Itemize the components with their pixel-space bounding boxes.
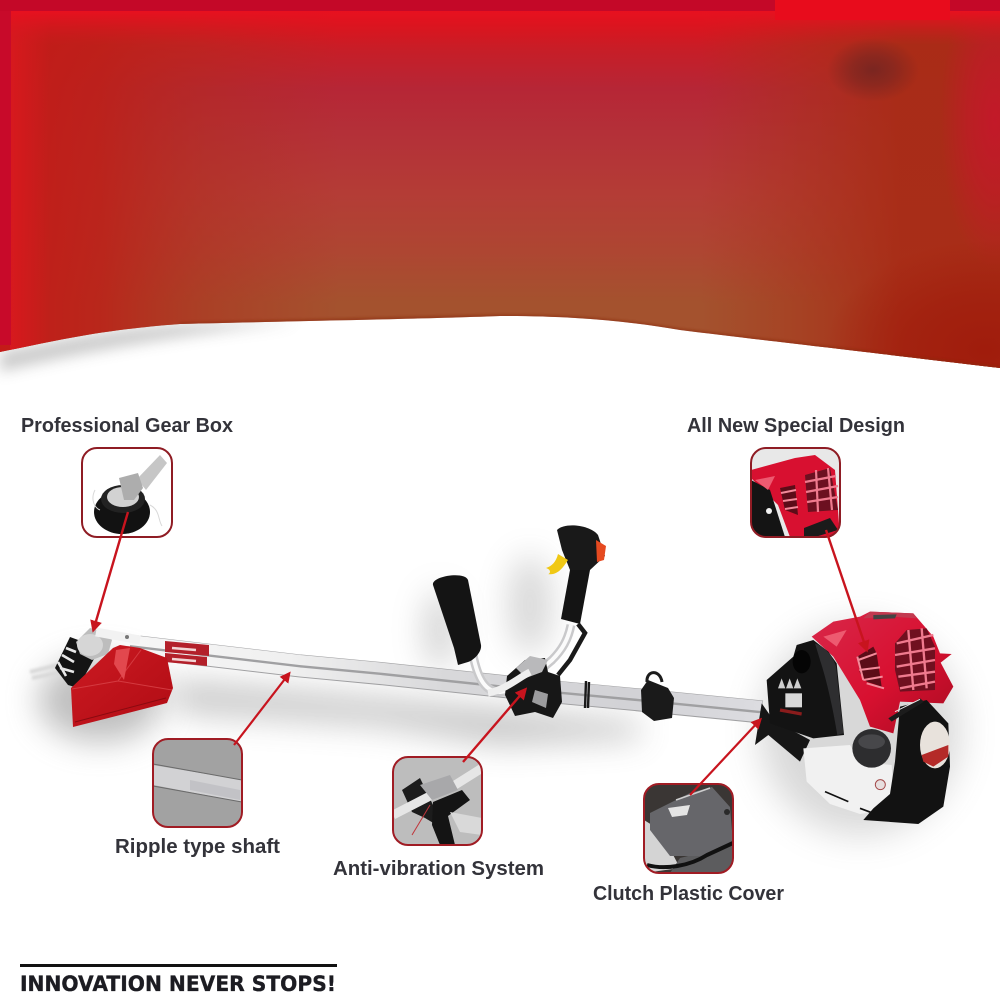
- inset: engine design: [751, 448, 840, 537]
- red cover: [812, 612, 953, 733]
- gear box: [76, 628, 112, 660]
- inset: gear box: [82, 448, 172, 537]
- cutter head and guard: [30, 628, 173, 727]
- clamp: [505, 658, 562, 718]
- recoil label: [920, 722, 950, 768]
- inset: ripple shaft: [153, 739, 242, 827]
- recoil housing: [863, 700, 950, 824]
- shaft stickers: [165, 641, 209, 666]
- right vent: [895, 628, 935, 692]
- inset: clutch cover: [644, 784, 733, 873]
- left grip: [433, 575, 481, 665]
- arrow: anti-vibration: [463, 691, 524, 762]
- arrow: gear box: [94, 512, 128, 628]
- arrow: ripple shaft: [234, 675, 288, 745]
- engine: [755, 612, 953, 824]
- fuel cap: [852, 729, 891, 768]
- trimmer line: [30, 664, 62, 678]
- red banner: [0, 0, 1000, 368]
- arrow: clutch cover: [690, 721, 759, 795]
- left vent: [857, 647, 884, 688]
- label: Ripple type shaft: Ripple type shaft: [115, 836, 280, 858]
- label: Clutch Plastic Cover: Clutch Plastic Cover: [593, 883, 784, 905]
- arrow: engine design: [826, 530, 866, 648]
- air cleaner: [767, 640, 844, 738]
- footer slogan: INNOVATION NEVER STOPS!: [20, 972, 336, 996]
- throttle: [557, 525, 605, 570]
- label: Professional Gear Box: Professional Gear Box: [21, 415, 233, 437]
- label: Anti-vibration System: Anti-vibration System: [333, 858, 544, 880]
- white fuel tank: [803, 745, 893, 814]
- spool: [55, 637, 100, 688]
- inset: anti-vibration clamp: [393, 757, 482, 845]
- shadow below banner edge: [0, 322, 300, 372]
- handlebar: [433, 525, 674, 721]
- harness clip: [641, 680, 674, 721]
- label: All New Special Design: All New Special Design: [687, 415, 905, 437]
- head tube: [96, 632, 140, 640]
- warning labels: [778, 678, 802, 714]
- handle bar: [473, 625, 571, 692]
- shaft bands: [585, 681, 589, 708]
- brushcutter shaft: [130, 640, 762, 718]
- guard: [71, 645, 173, 727]
- lower frame: [755, 703, 810, 762]
- right grip: [561, 570, 590, 624]
- soft shadows under product: [38, 555, 960, 835]
